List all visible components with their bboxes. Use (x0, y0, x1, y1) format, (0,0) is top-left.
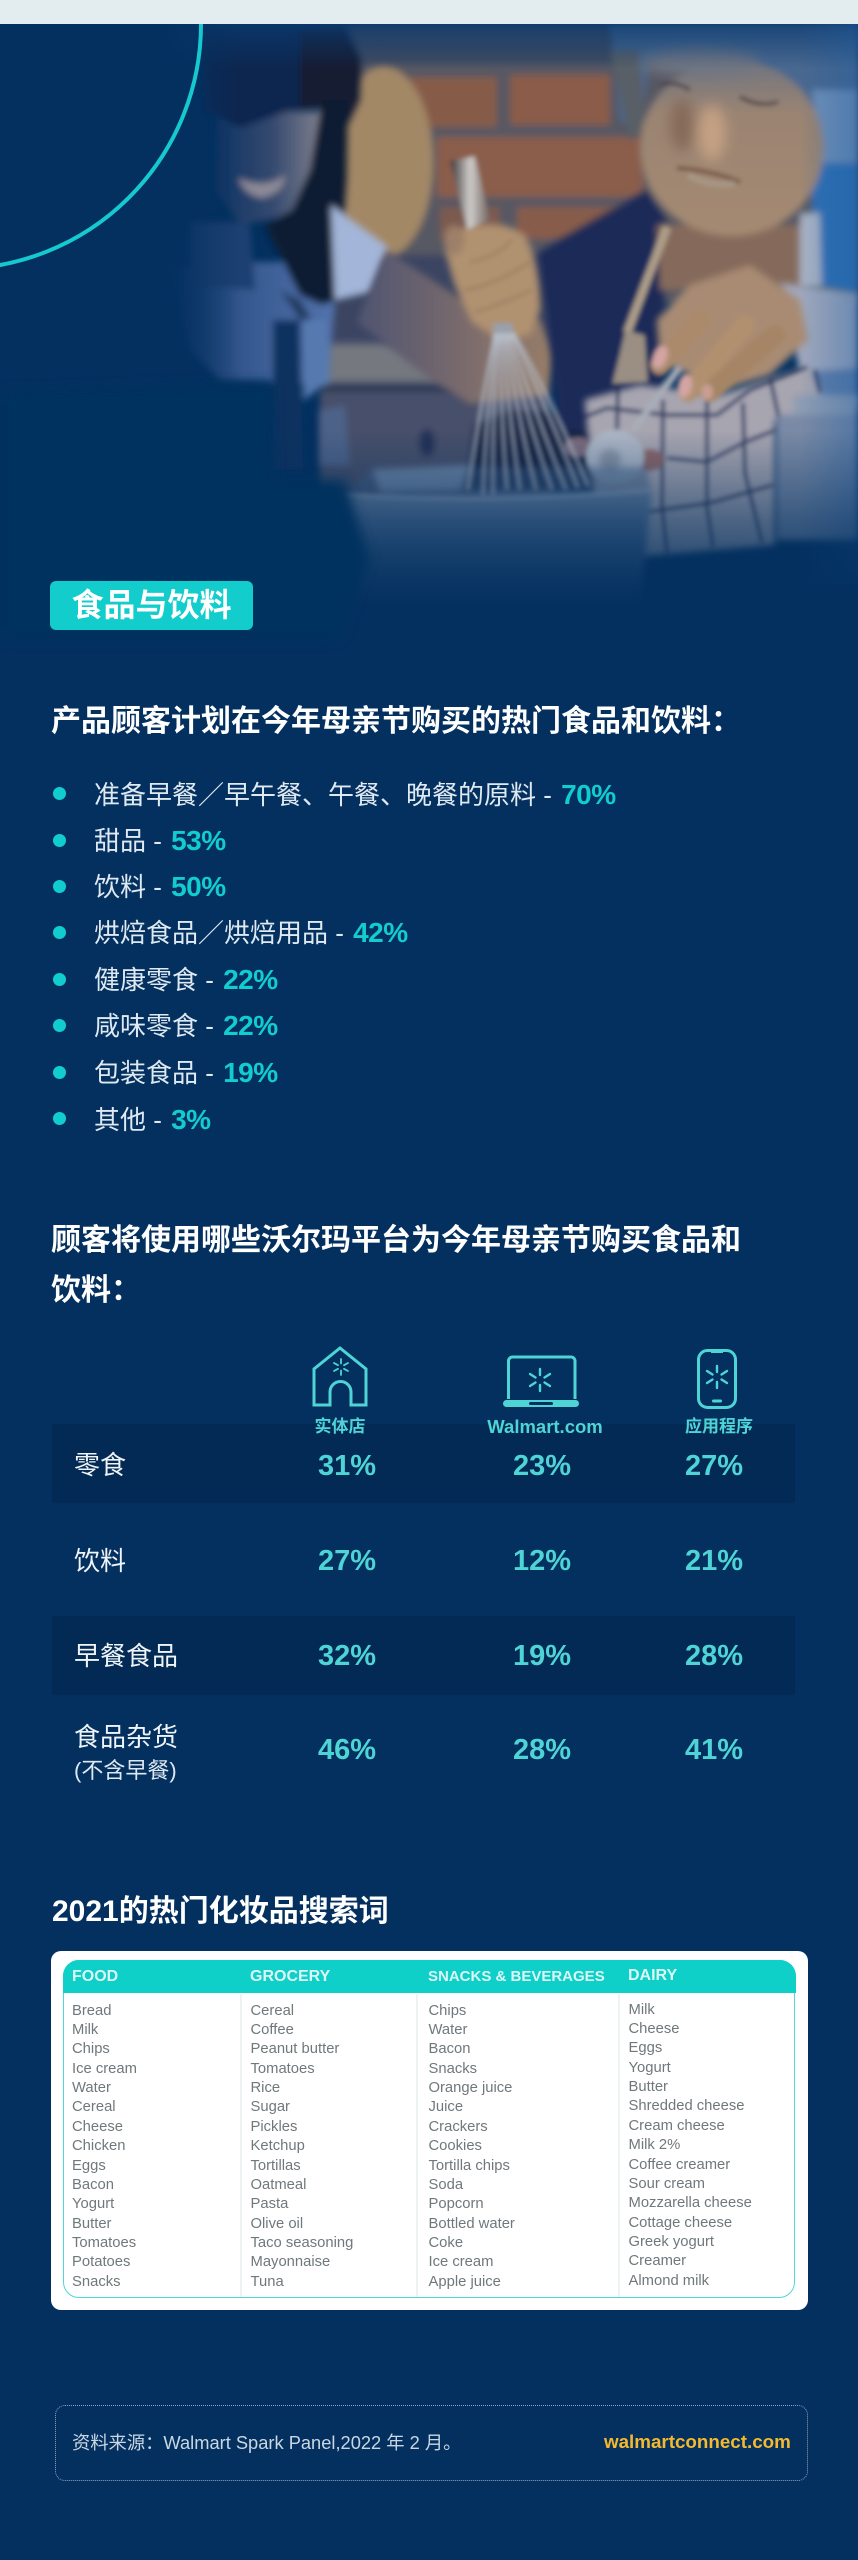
grocery terms: Cereal (250, 2003, 294, 2019)
bullet list of planned purchases: 咸味零食 - 22% (94, 1010, 278, 1041)
bullet list of planned purchases: 包装食品 - 19% (94, 1057, 278, 1088)
bullet 2 (53, 834, 66, 847)
food terms: Yogurt (72, 2196, 114, 2212)
dairy terms: Greek yogurt (628, 2234, 714, 2250)
column separator 2 (416, 1994, 418, 2297)
snacks and beverages terms: Crackers (428, 2119, 488, 2135)
grocery terms: Pasta (250, 2196, 288, 2212)
top light band (0, 0, 858, 24)
row: 饮料: 12% (513, 1545, 571, 1577)
bullet list of planned purchases: 准备早餐／早午餐、午餐、晚餐的原料 - 70% (94, 779, 616, 810)
food terms: Eggs (72, 2158, 106, 2174)
spoon (564, 367, 680, 484)
snacks and beverages terms: Chips (428, 2003, 466, 2019)
dairy terms: Cottage cheese (628, 2215, 732, 2231)
row: 零食: 23% (513, 1450, 571, 1482)
bullet list of planned purchases: 烘焙食品／烘焙用品 - 42% (94, 917, 408, 948)
row: 食品杂货: 食品杂货 (74, 1722, 178, 1752)
bullet 4 (53, 926, 66, 939)
bullet list of planned purchases: 甜品 - 53% (94, 825, 226, 856)
food terms: Ice cream (72, 2061, 137, 2077)
grocery terms: Peanut butter (250, 2041, 339, 2057)
row: 零食 (74, 1450, 743, 1482)
food terms (72, 2003, 137, 2290)
search terms card (51, 1951, 808, 2310)
grocery terms: Ketchup (250, 2138, 305, 2154)
food terms: Tomatoes (72, 2235, 136, 2251)
woman (538, 24, 858, 437)
snacks and beverages terms: Orange juice (428, 2080, 512, 2096)
food terms: Cheese (72, 2119, 123, 2135)
row: 食品杂货: 28% (513, 1734, 571, 1766)
dairy terms: Shredded cheese (628, 2098, 744, 2114)
girl's arm and hand (357, 224, 553, 404)
bullet list of planned purchases: 饮料 - 50% (94, 871, 226, 902)
food terms: Chips (72, 2041, 110, 2057)
snacks and beverages terms: Water (428, 2022, 467, 2038)
heading: Walmart platforms (51, 1224, 741, 1307)
snacks and beverages terms: Cookies (428, 2138, 482, 2154)
source text: 资料来源：Walmart Spark Panel,2022 年 2 月。 (72, 2432, 461, 2453)
whisk wires (468, 332, 588, 495)
row: 零食: 31% (318, 1450, 376, 1482)
teal outlined inner table (63, 1960, 795, 2298)
food terms: Cereal (72, 2099, 116, 2115)
row: 早餐食品: 28% (685, 1640, 743, 1672)
grocery terms: Tortillas (250, 2158, 301, 2174)
food terms: Bread (72, 2003, 112, 2019)
row: 早餐食品: 早餐食品 (74, 1641, 178, 1671)
dark area behind whisk (467, 410, 600, 490)
sleeve and background right (780, 283, 858, 408)
bullet 1 (53, 787, 66, 800)
snacks and beverages terms: Ice cream (428, 2254, 493, 2270)
dairy terms: Coffee creamer (628, 2157, 730, 2173)
row: 食品杂货: 46% (318, 1734, 376, 1766)
column header: GROCERY: GROCERY (250, 1968, 330, 1985)
dairy terms: Cream cheese (628, 2118, 725, 2134)
column label: 实体店: 实体店 (314, 1417, 366, 1436)
dairy terms: Sour cream (628, 2176, 705, 2192)
whisk handle (450, 156, 490, 230)
row: 早餐食品 (74, 1640, 743, 1672)
heading: Walmart platforms: 饮料： (51, 1274, 141, 1307)
column header: SNACKS & BEVERAGES: SNACKS & BEVERAGES (428, 1968, 605, 1985)
food terms: Snacks (72, 2274, 121, 2290)
column header: DAIRY: DAIRY (628, 1967, 677, 1984)
snacks and beverages terms: Soda (428, 2177, 463, 2193)
row: 零食: 27% (685, 1450, 743, 1482)
glass bowl (345, 465, 652, 610)
row: 饮料: 27% (318, 1545, 376, 1577)
row: 饮料: 饮料 (74, 1546, 126, 1576)
girl (170, 24, 388, 470)
heading: Walmart platforms: 顾客将使用哪些沃尔玛平台为今年母亲节购买食品和 (51, 1224, 741, 1257)
fades (0, 24, 858, 69)
woman's hand (657, 265, 808, 390)
dairy terms: Cheese (628, 2021, 680, 2037)
bullet 6 (53, 1019, 66, 1032)
apron strap (612, 227, 667, 384)
food terms: Butter (72, 2216, 111, 2232)
column separator 1 (240, 1994, 242, 2297)
column header: FOOD: FOOD (72, 1968, 118, 1985)
food terms: Chicken (72, 2138, 125, 2154)
website: walmartconnect.com (604, 2431, 791, 2452)
grocery terms: Tomatoes (250, 2061, 315, 2077)
row: 食品杂货 (74, 1722, 743, 1783)
wall (320, 24, 858, 510)
hero photo: girl and grandmother whisking in a bowl (190, 24, 858, 578)
bullet list of planned purchases: 健康零食 - 22% (94, 964, 278, 995)
bullet 7 (53, 1066, 66, 1079)
grocery terms: Mayonnaise (250, 2254, 330, 2270)
icon: laptop (503, 1356, 579, 1407)
column separator 3 (618, 1994, 620, 2297)
jar (776, 395, 858, 540)
food terms: Potatoes (72, 2254, 130, 2270)
section tag: 食品与饮料 (50, 581, 253, 630)
dairy terms: Almond milk (628, 2273, 709, 2289)
bullet list of planned purchases: 其他 - 3% (94, 1104, 211, 1135)
snacks and beverages terms: Coke (428, 2235, 463, 2251)
apron cloth (585, 366, 822, 560)
table row band 3 (52, 1616, 795, 1695)
grocery terms: Taco seasoning (250, 2235, 353, 2251)
row: 早餐食品: 32% (318, 1640, 376, 1672)
footer source box (55, 2405, 808, 2481)
grocery terms: Oatmeal (250, 2177, 306, 2193)
bullet 8 (53, 1112, 66, 1125)
dairy terms (628, 2002, 752, 2289)
icon: phone (697, 1349, 737, 1409)
snacks and beverages terms: Apple juice (428, 2274, 501, 2290)
dairy terms: Eggs (628, 2040, 662, 2056)
column label: Walmart.com: Walmart.com (487, 1416, 603, 1437)
grocery terms: Sugar (250, 2099, 290, 2115)
snacks and beverages terms: Juice (428, 2099, 463, 2115)
dairy terms: Creamer (628, 2253, 686, 2269)
snacks and beverages terms: Popcorn (428, 2196, 484, 2212)
decorative teal arc (0, 24, 203, 268)
blurred photo painting (170, 24, 858, 610)
dairy terms: Butter (628, 2079, 668, 2095)
heading: 2021 top search terms: 2021的热门化妆品搜索词 (52, 1895, 389, 1928)
grocery terms: Pickles (250, 2119, 297, 2135)
snacks and beverages terms: Snacks (428, 2061, 477, 2077)
column label: 应用程序: 应用程序 (685, 1417, 753, 1436)
dairy terms: Milk (628, 2002, 655, 2018)
bullet 5 (53, 973, 66, 986)
row: 饮料: 21% (685, 1545, 743, 1577)
teal header band (63, 1960, 796, 1993)
snacks and beverages terms: Bottled water (428, 2216, 515, 2232)
heading: top food and beverage products: 产品顾客计划在今年母亲节购买的热门食品和饮料： (51, 705, 741, 738)
table row band 1 (52, 1424, 795, 1503)
snacks and beverages terms: Bacon (428, 2041, 470, 2057)
dairy terms: Milk 2% (628, 2137, 680, 2153)
row: 食品杂货: 41% (685, 1734, 743, 1766)
snacks and beverages terms: Tortilla chips (428, 2158, 510, 2174)
icon: store (312, 1346, 368, 1406)
row: 饮料 (74, 1545, 743, 1577)
food terms: Water (72, 2080, 111, 2096)
section tag: 食品与饮料: 食品与饮料 (71, 587, 232, 623)
bullet list of planned purchases (53, 779, 616, 1135)
dairy terms: Mozzarella cheese (628, 2195, 752, 2211)
snacks and beverages terms (428, 2003, 515, 2290)
grocery terms: Coffee (250, 2022, 294, 2038)
row: 零食: 零食 (74, 1450, 126, 1480)
row: 早餐食品: 19% (513, 1640, 571, 1672)
food terms: Milk (72, 2022, 98, 2038)
grocery terms: Olive oil (250, 2216, 303, 2232)
row: 食品杂货: (不含早餐) (74, 1758, 177, 1783)
grocery terms (250, 2003, 353, 2290)
food terms: Bacon (72, 2177, 114, 2193)
grocery terms: Tuna (250, 2274, 284, 2290)
dairy terms: Yogurt (628, 2060, 671, 2076)
bullet 3 (53, 880, 66, 893)
grocery terms: Rice (250, 2080, 280, 2096)
